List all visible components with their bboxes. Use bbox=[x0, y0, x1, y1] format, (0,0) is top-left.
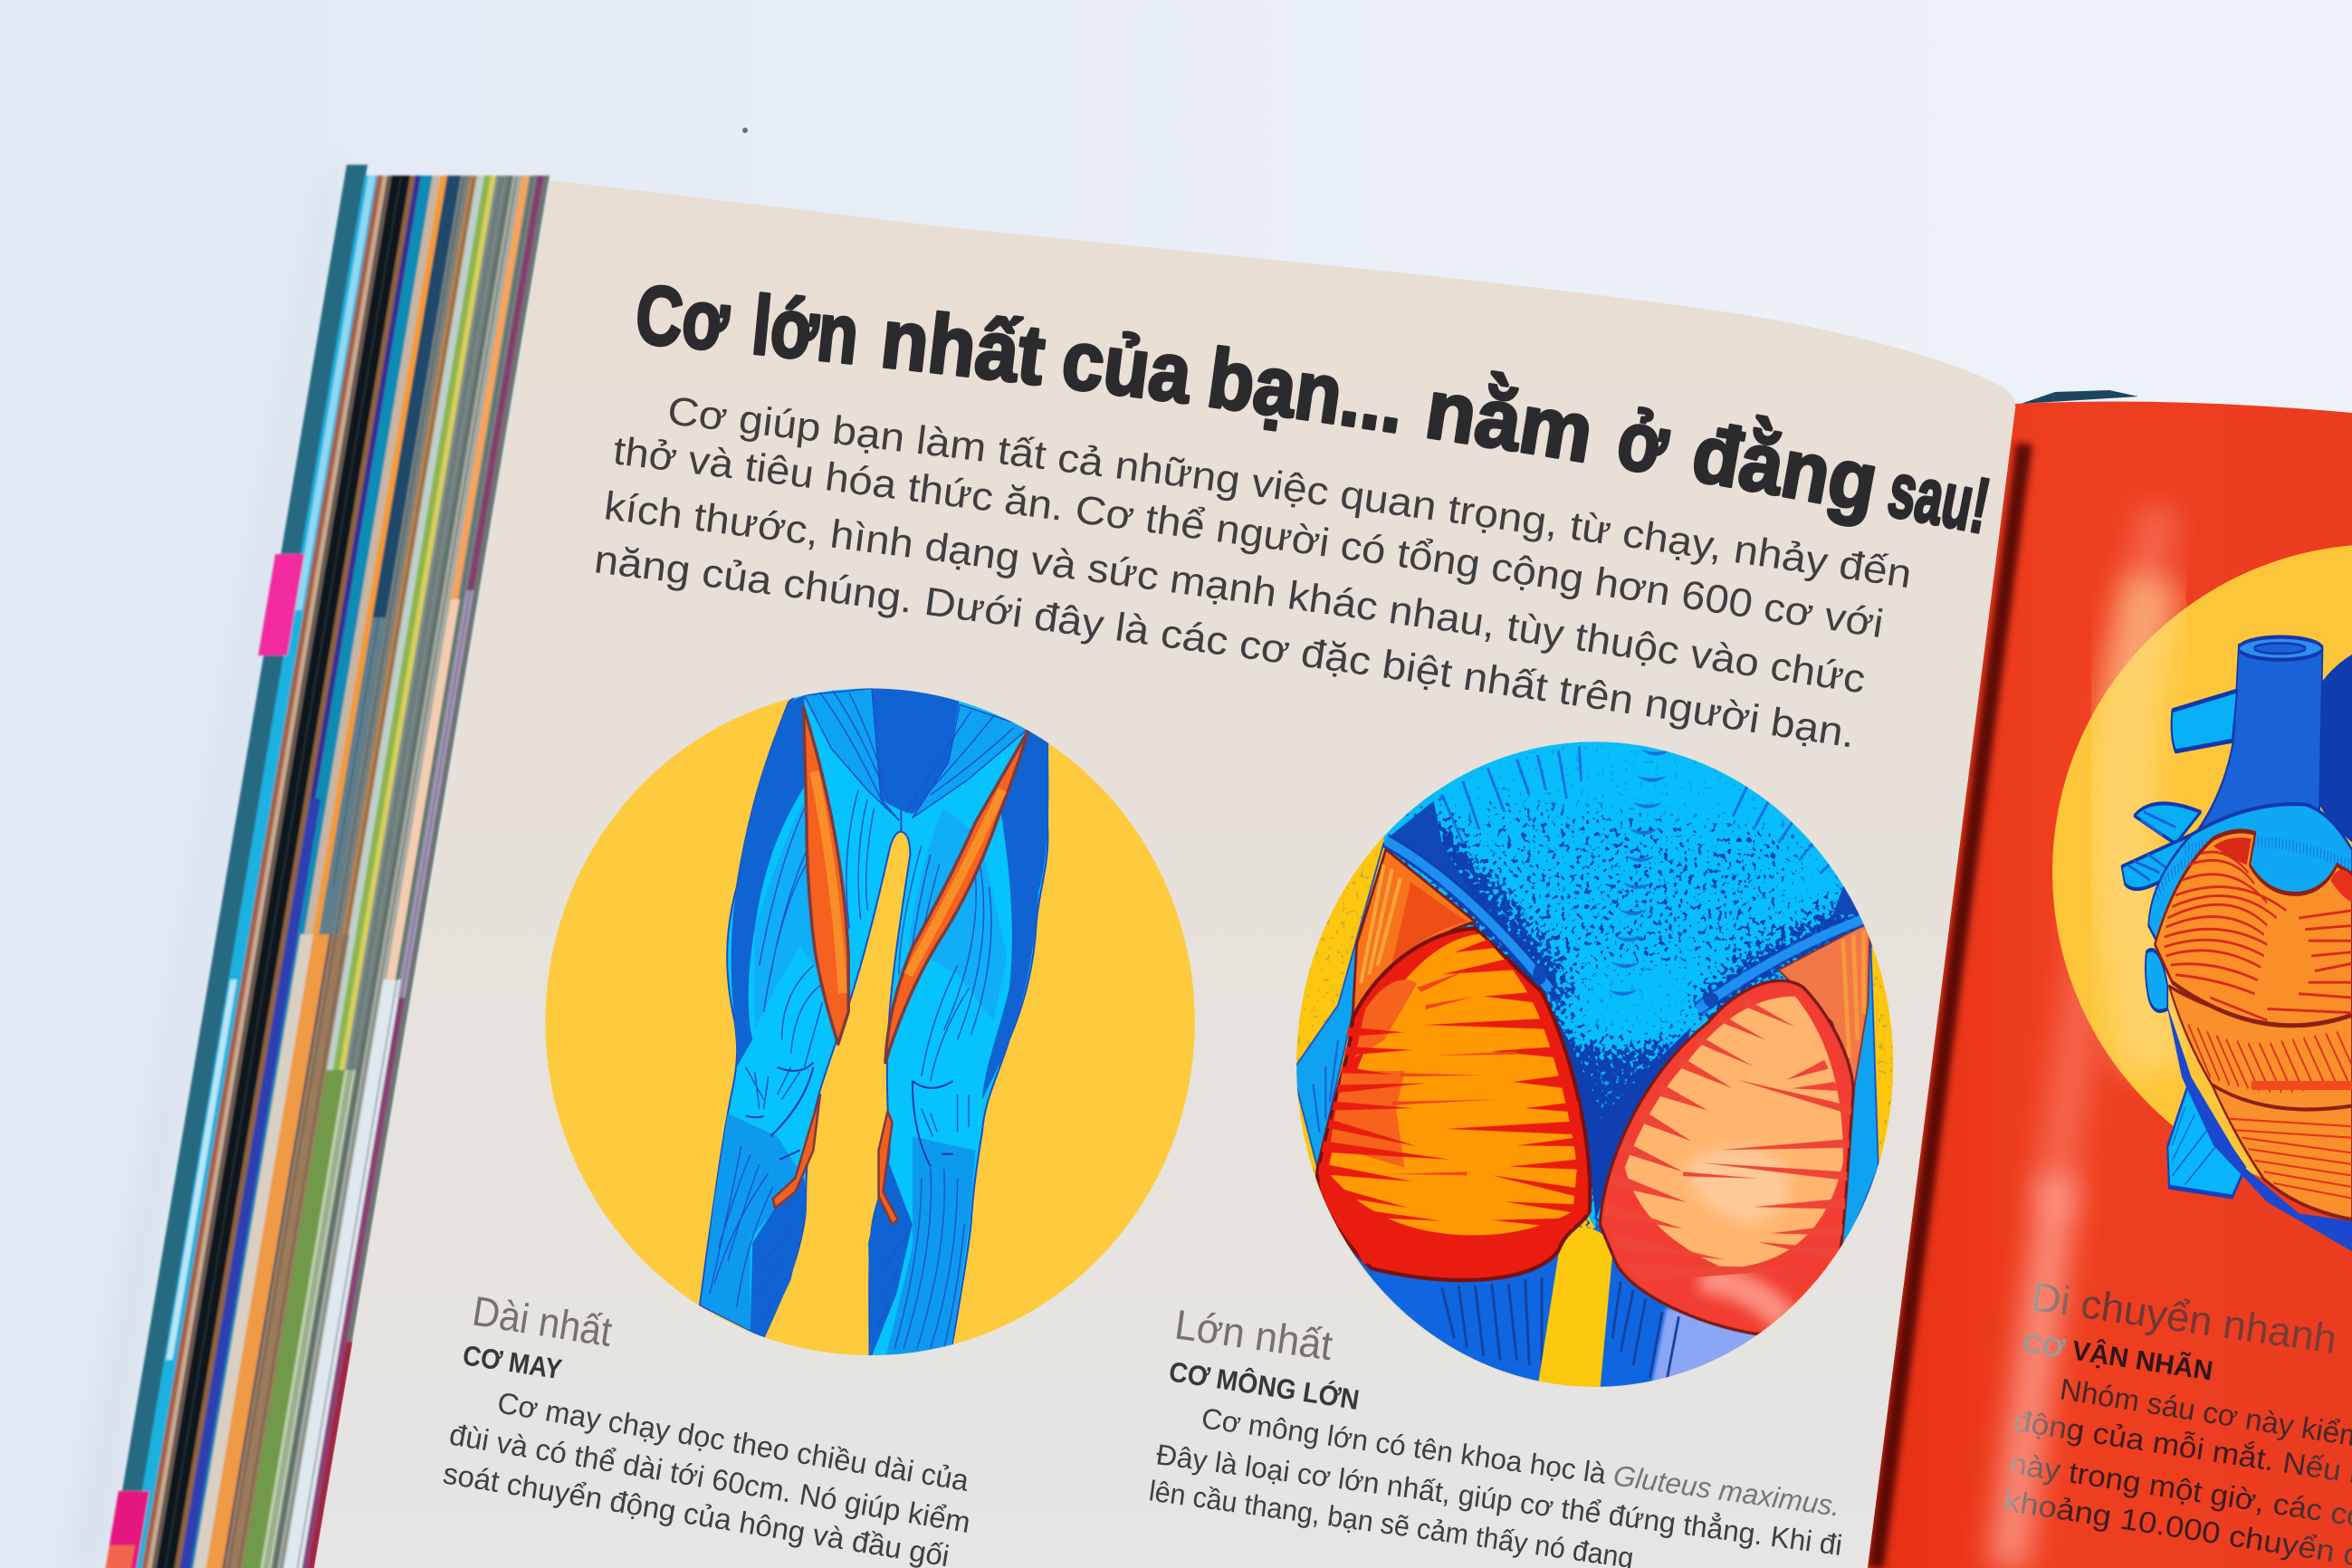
lower vein bbox=[2167, 1085, 2245, 1197]
book spine and stacked page edges bbox=[102, 165, 552, 1568]
heading: Lớn nhất: Lớn nhất bbox=[1172, 1300, 1335, 1369]
vertebrae bbox=[1608, 750, 1670, 996]
aorta bbox=[2197, 645, 2323, 831]
illustration: gluteus maximus bbox=[1293, 715, 1893, 1409]
muscle hatch lines bbox=[710, 684, 1014, 1349]
speck on background bbox=[742, 128, 748, 133]
subheading: CƠ MÔNG LỚN: CƠ MÔNG LỚN bbox=[1167, 1354, 1362, 1416]
body line: này trong một giờ, các cơ bbox=[2007, 1446, 2352, 1534]
intro text block: thở và tiêu hóa thức ăn. Cơ thể người có tổng cộng hơn 600 cơ với bbox=[615, 436, 1883, 637]
stippled shading bbox=[1417, 803, 1858, 1229]
atrium bbox=[2148, 804, 2352, 971]
left corner dark bbox=[1390, 801, 1476, 900]
intro text block: kích thước, hình dạng và sức mạnh khác nhau, tùy thuộc vào chức bbox=[606, 491, 1864, 692]
pulmonary branch bbox=[2172, 691, 2237, 751]
subheading: CƠ MAY: CƠ MAY bbox=[461, 1339, 564, 1385]
intro text block: Cơ giúp bạn làm tất cả những việc quan trọng, từ chạy, nhảy đến bbox=[670, 398, 1908, 588]
dark calf left bbox=[751, 1178, 807, 1337]
right gluteus bbox=[1600, 980, 1853, 1334]
left gluteus bbox=[1317, 928, 1590, 1280]
title: Cơ bbox=[637, 284, 731, 351]
right outer blue band bbox=[1840, 922, 1879, 1259]
left sartorius bbox=[803, 707, 848, 1044]
yellow disc bbox=[1296, 741, 1893, 1387]
yellow disc on right page bbox=[2052, 544, 2352, 1200]
solid dark V bbox=[1546, 1005, 1691, 1220]
lower leg shin tones bbox=[701, 1114, 804, 1331]
illustration: legs with sartorius muscle bbox=[545, 684, 1195, 1358]
panel: left page paper bbox=[314, 180, 2015, 1568]
heading: Dài nhất: Dài nhất bbox=[469, 1287, 616, 1355]
title: sau! bbox=[1888, 474, 1990, 534]
intro text block: năng của chúng. Dưới đây là các cơ đặc biệt nhất trên người bạn. bbox=[596, 547, 1850, 748]
title bbox=[637, 284, 1990, 534]
caption: longest muscle bbox=[441, 1287, 973, 1568]
right strap bbox=[1697, 915, 1874, 1009]
title: của bbox=[1063, 331, 1190, 405]
title: lớn bbox=[753, 292, 856, 365]
title: nằm bbox=[1427, 370, 1590, 464]
lower blue bbox=[1330, 1225, 1808, 1409]
lower right tendon bbox=[879, 1111, 898, 1224]
intro text block bbox=[592, 388, 1915, 757]
soft shadow left of book bbox=[72, 172, 339, 1568]
heading: Di chuyển nhanh: Di chuyển nhanh bbox=[2029, 1273, 2339, 1362]
dark calf right bbox=[868, 1160, 913, 1358]
right sartorius bbox=[885, 730, 1028, 1063]
body line: đùi và có thể dài tới 60cm. Nó giúp kiểm bbox=[447, 1417, 973, 1539]
right upper muscle bbox=[1779, 922, 1870, 1093]
small vessels bbox=[2135, 803, 2201, 844]
text: right page label bbox=[2002, 1273, 2352, 1568]
muscle layer lower bbox=[2210, 1081, 2352, 1219]
back muscle ticks bbox=[1442, 746, 1839, 874]
title: ở bbox=[1619, 406, 1671, 473]
body line: Đây là loại cơ lớn nhất, giúp cơ thể đứng thẳng. Khi đi bbox=[1154, 1438, 1844, 1562]
subheading: CƠ VẬN NHÃN: CƠ VẬN NHÃN bbox=[2021, 1327, 2215, 1387]
illustration: heart bbox=[2122, 637, 2352, 1251]
muscle layer middle bbox=[2169, 986, 2352, 1109]
dark cover sliver at top of right page bbox=[2021, 390, 2138, 404]
muscle layer top bbox=[2155, 831, 2352, 1026]
knee lines bbox=[746, 1063, 953, 1166]
medium thigh tones bbox=[755, 799, 817, 1030]
lower left tendon bbox=[773, 1095, 820, 1208]
title: nhất bbox=[883, 310, 1047, 386]
body line: Cơ may chạy dọc theo chiều dài của bbox=[495, 1385, 971, 1497]
yellow strip between legs bbox=[1538, 1228, 1613, 1391]
dark outer left thigh bbox=[731, 695, 805, 1067]
cyan lower back bbox=[1383, 741, 1866, 1228]
left upper muscle bbox=[1353, 849, 1476, 1016]
left leg bbox=[700, 684, 901, 1337]
pelvis bbox=[872, 684, 960, 814]
body line: động của mỗi mắt. Nếu b bbox=[2012, 1403, 2352, 1491]
title: bạn... bbox=[1208, 344, 1398, 434]
dark outer right thigh bbox=[982, 730, 1048, 1099]
body line: Cơ mông lớn có tên khoa học là Gluteus maximus. bbox=[1200, 1401, 1842, 1523]
yellow disc bbox=[545, 688, 1195, 1355]
title: đằng bbox=[1694, 415, 1876, 527]
caption: largest muscle bbox=[1147, 1300, 1844, 1568]
body line: khoảng 10.000 chuyển đ bbox=[2002, 1483, 2352, 1568]
right corner dark bbox=[1832, 865, 1879, 915]
left outer blue band bbox=[1293, 843, 1384, 1168]
dark blue back of heart bbox=[2166, 1001, 2352, 1251]
panel: red right page bbox=[1856, 390, 2352, 1568]
left straps bbox=[1386, 840, 1550, 990]
right leg bbox=[869, 684, 1047, 1358]
